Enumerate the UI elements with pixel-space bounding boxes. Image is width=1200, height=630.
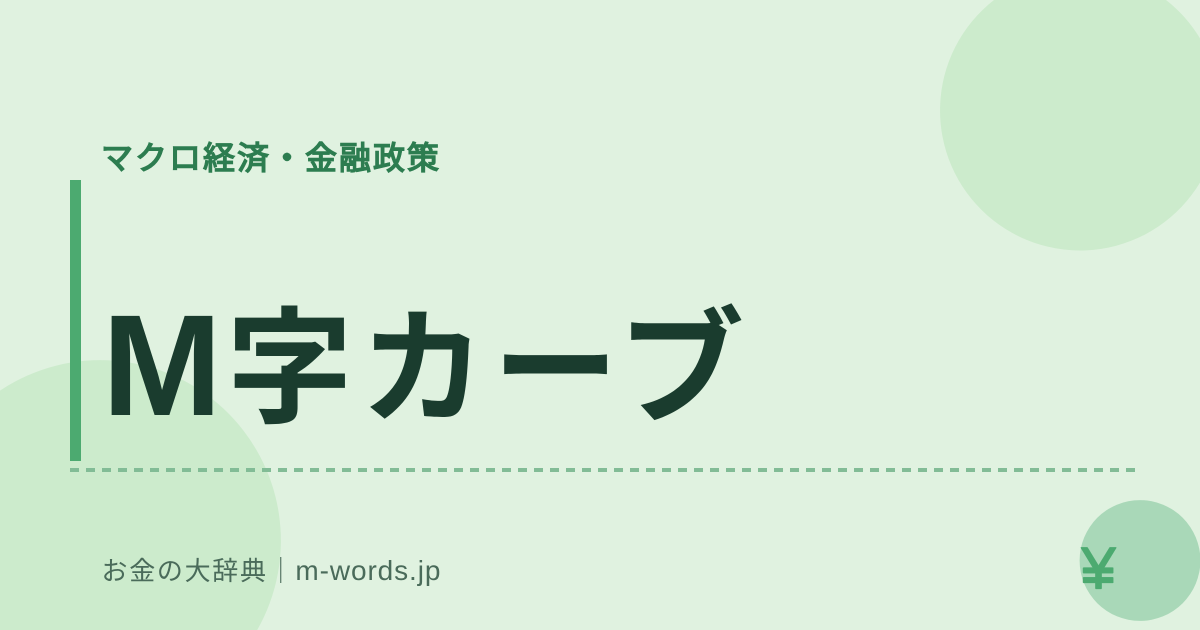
title: M字カーブ [102, 268, 751, 450]
footer text: お金の大辞典｜m-words.jp [102, 551, 441, 588]
category label: マクロ経済・金融政策 [101, 133, 441, 179]
accent bar [70, 180, 81, 461]
icon: yen symbol: ¥ [1080, 544, 1117, 598]
dashed divider [70, 468, 1136, 472]
